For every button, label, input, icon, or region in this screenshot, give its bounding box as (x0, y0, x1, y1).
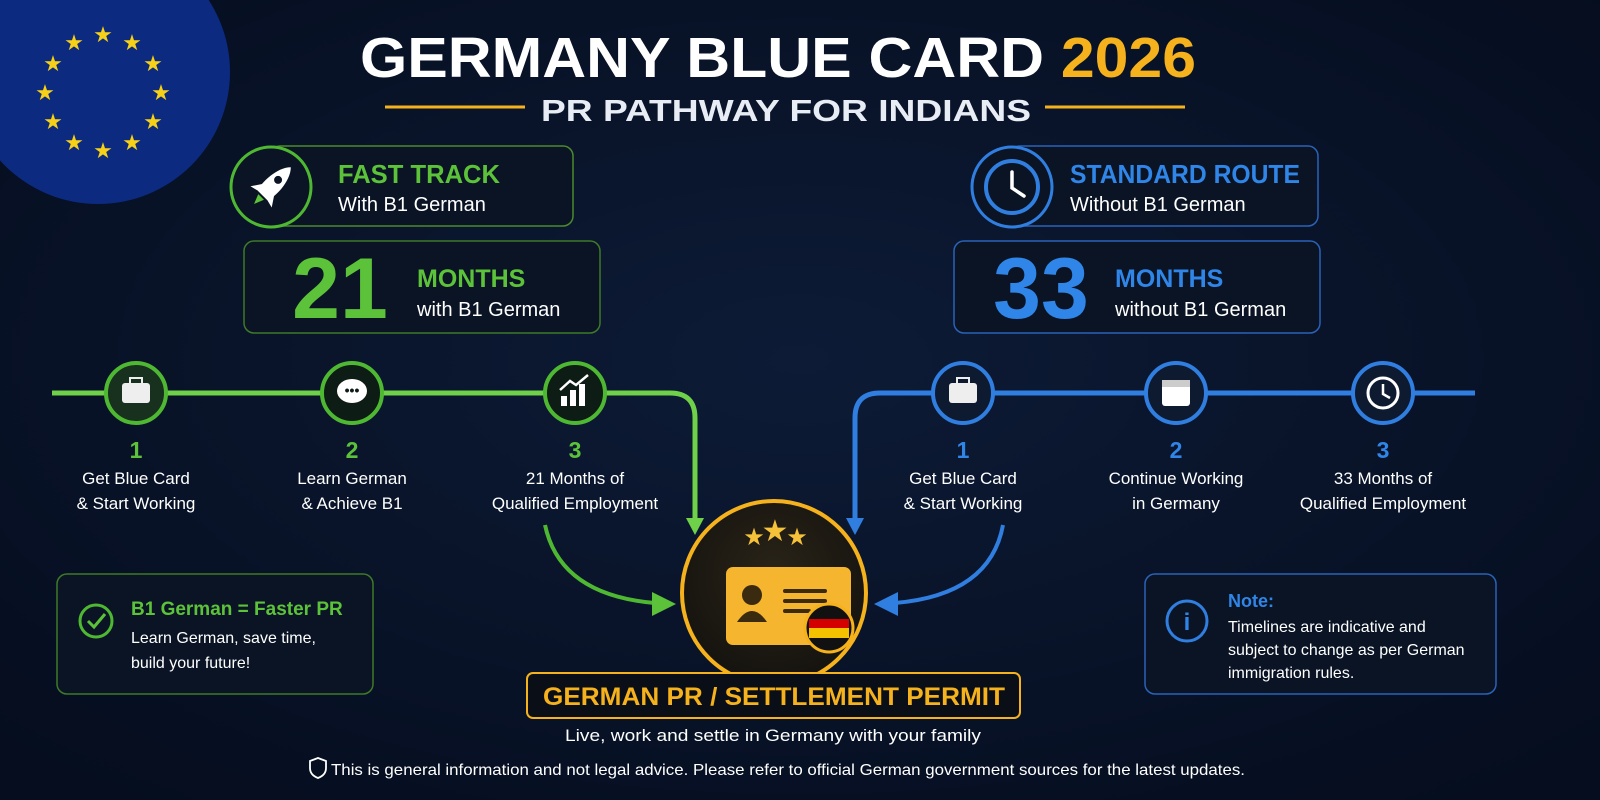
callout: B1 German: B1 German = Faster PR (131, 599, 343, 620)
panel: 21 months: with B1 German (416, 299, 560, 321)
step nodes green (106, 363, 605, 423)
icon: PR card badge (682, 501, 866, 685)
EU flag circle: ★ (43, 51, 63, 76)
panel: fast track header: With B1 German (338, 194, 486, 216)
callout: note (1145, 574, 1496, 694)
step labels green: Learn German (297, 469, 407, 488)
arrow: green curve to center (545, 525, 676, 616)
icon: PR card badge: ★ (762, 515, 788, 548)
step labels green: 21 Months of (526, 469, 624, 488)
callout: note: Timelines are indicative and (1228, 619, 1426, 636)
step labels green: 1 (130, 437, 143, 463)
EU flag circle: ★ (122, 30, 142, 55)
icon: PR card badge: ★ (786, 524, 808, 551)
EU flag circle: ★ (122, 130, 142, 155)
EU flag circle: ★ (35, 80, 55, 105)
icon: PR card badge: ★ (743, 524, 765, 551)
EU flag circle: ★ (143, 51, 163, 76)
step labels green: Qualified Employment (492, 494, 658, 513)
text: PR caption: Live, work and settle in Germany with your family (565, 726, 982, 745)
callout: B1 German: build your future! (131, 655, 250, 672)
panel: standard route header: STANDARD ROUTE (1070, 159, 1300, 189)
subtitle: PR PATHWAY FOR INDIANS (541, 93, 1031, 128)
panel: 33 months: MONTHS (1115, 265, 1223, 293)
callout: note: Note: (1228, 591, 1274, 611)
step labels blue: 3 (1377, 437, 1389, 463)
step labels blue: Qualified Employment (1300, 494, 1466, 513)
panel: standard route header: Without B1 German (1070, 194, 1246, 216)
step labels blue: 33 Months of (1334, 469, 1432, 488)
EU flag circle: ★ (143, 109, 163, 134)
step labels blue: 1 (957, 437, 970, 463)
step labels blue: Continue Working (1109, 469, 1243, 488)
callout: note: immigration rules. (1228, 665, 1354, 682)
arrow: blue timeline (846, 393, 1475, 535)
icon: german flag (805, 604, 853, 652)
callout: note: subject to change as per German (1228, 642, 1465, 659)
footer disclaimer: This is general information and not legal advice. Please refer to official German government sources for the latest updates. (331, 762, 1245, 779)
EU flag circle: ★ (151, 80, 171, 105)
step labels blue: Get Blue Card (909, 469, 1017, 488)
callout: B1 German (57, 574, 373, 694)
step labels blue (904, 437, 1466, 513)
EU flag circle: ★ (64, 130, 84, 155)
title: GERMANY BLUE CARD 2026 (360, 26, 1196, 90)
heading: PR label (527, 673, 1020, 718)
heading: PR label: GERMAN PR / SETTLEMENT PERMIT (543, 683, 1005, 711)
step labels green: Get Blue Card (82, 469, 190, 488)
panel: fast track header (231, 146, 573, 227)
EU flag circle: ★ (64, 30, 84, 55)
step nodes green: ••• (345, 382, 359, 398)
arrow: blue curve to center (874, 525, 1003, 616)
EU flag circle (0, 0, 230, 204)
arrow: green timeline (52, 393, 704, 535)
callout: B1 German: Learn German, save time, (131, 630, 316, 647)
step labels green: & Achieve B1 (301, 494, 403, 513)
panel: 33 months: 33 (993, 241, 1089, 337)
panel: fast track header: FAST TRACK (338, 159, 500, 189)
icon: clock (986, 161, 1038, 213)
icon: rocket (243, 157, 301, 215)
callout: note: i (1184, 609, 1190, 636)
EU flag circle: ★ (93, 22, 113, 47)
step labels green: 3 (569, 437, 581, 463)
panel: standard route header (972, 146, 1318, 227)
panel: 21 months: MONTHS (417, 265, 525, 293)
panel: 33 months (954, 241, 1320, 337)
panel: 21 months (244, 241, 600, 337)
step labels green: & Start Working (77, 494, 195, 513)
panel: 21 months: 21 (292, 241, 388, 337)
step labels blue: & Start Working (904, 494, 1022, 513)
step labels green: 2 (346, 437, 358, 463)
panel: 33 months: without B1 German (1114, 299, 1286, 321)
step nodes blue (933, 363, 1413, 423)
EU flag circle: ★ (93, 138, 113, 163)
EU flag circle: ★ (43, 109, 63, 134)
step labels green (77, 437, 658, 513)
step labels blue: 2 (1170, 437, 1182, 463)
step labels blue: in Germany (1132, 494, 1220, 513)
